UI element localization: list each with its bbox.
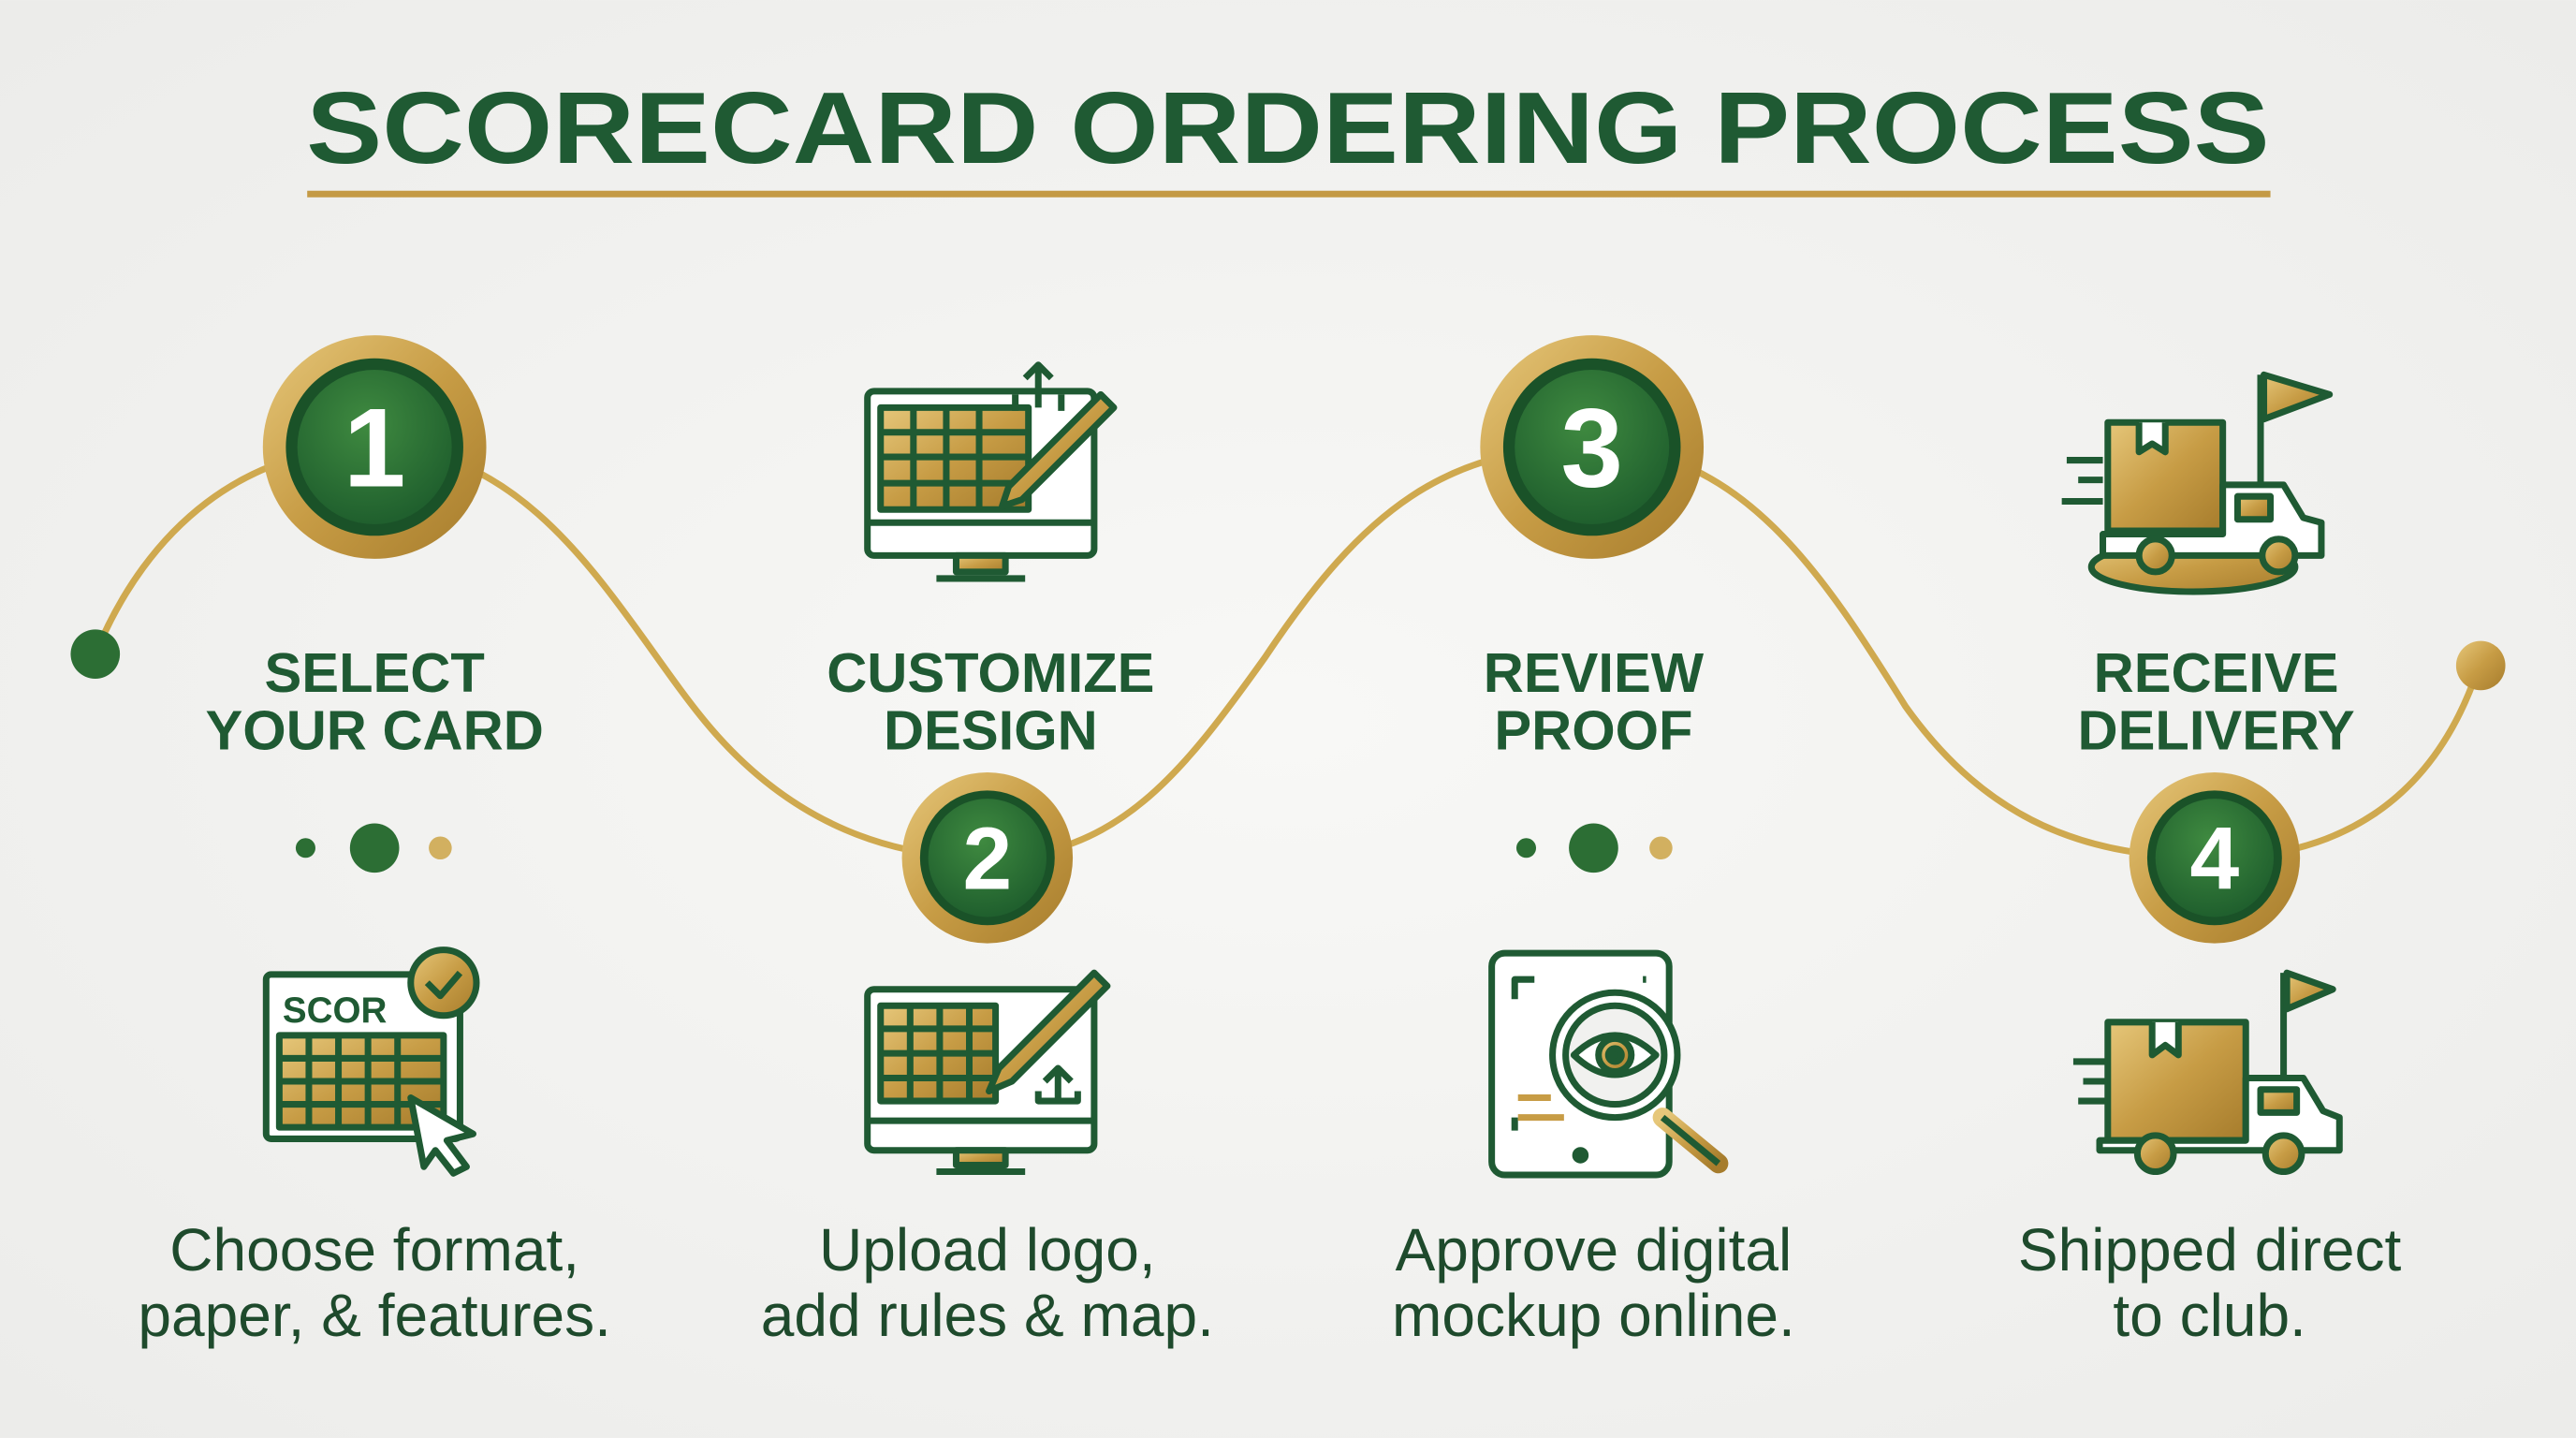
step 4 badge [2130, 772, 2300, 944]
description: step 3: Approve digital [1396, 1216, 1792, 1284]
wave path connector [95, 448, 2478, 858]
heading: step 3: PROOF [1494, 698, 1693, 761]
heading: step 1: YOUR CARD [206, 698, 544, 761]
icon: scorecard (step 1) [266, 950, 476, 1173]
step 2 badge [902, 772, 1073, 944]
icon: truck top (step 4) [2062, 374, 2330, 592]
step 4 badge: 4 [2190, 810, 2240, 909]
start golf ball (green) [70, 629, 120, 679]
icon: truck bottom (step 4) [2073, 973, 2339, 1172]
description: step 2: add rules & map. [761, 1282, 1214, 1349]
heading: step 3: REVIEW [1484, 641, 1705, 704]
description: step 4: to club. [2113, 1282, 2306, 1349]
description: step 2: Upload logo, [819, 1216, 1156, 1284]
dots: step 1 [296, 823, 452, 873]
step 2 badge: 2 [962, 810, 1012, 909]
step 3 badge: 3 [1561, 387, 1623, 511]
icon: tablet with magnifier (step 3) [1492, 953, 1719, 1175]
dots: step 3 [1516, 823, 1673, 873]
icon: monitor bottom (step 2) [868, 973, 1107, 1172]
description: step 3: mockup online. [1392, 1282, 1795, 1349]
description: step 4: Shipped direct [2018, 1216, 2402, 1284]
icon: scorecard (step 1): SCOR [283, 990, 388, 1031]
step 1 badge [263, 335, 487, 559]
description: step 1: Choose format, [169, 1216, 579, 1284]
heading: step 4: RECEIVE [2094, 641, 2339, 704]
step 3 badge [1480, 335, 1704, 559]
end golf ball (gold) [2456, 641, 2506, 690]
heading: step 2: DESIGN [884, 698, 1098, 761]
heading: step 2: CUSTOMIZE [827, 641, 1154, 704]
description: step 1: paper, & features. [138, 1282, 611, 1349]
heading: step 4: DELIVERY [2078, 698, 2355, 761]
heading: step 1: SELECT [264, 641, 485, 704]
step 1 badge: 1 [344, 387, 405, 511]
title: SCORECARD ORDERING PROCESS [306, 71, 2270, 185]
icon: monitor top (step 2) [868, 365, 1114, 579]
